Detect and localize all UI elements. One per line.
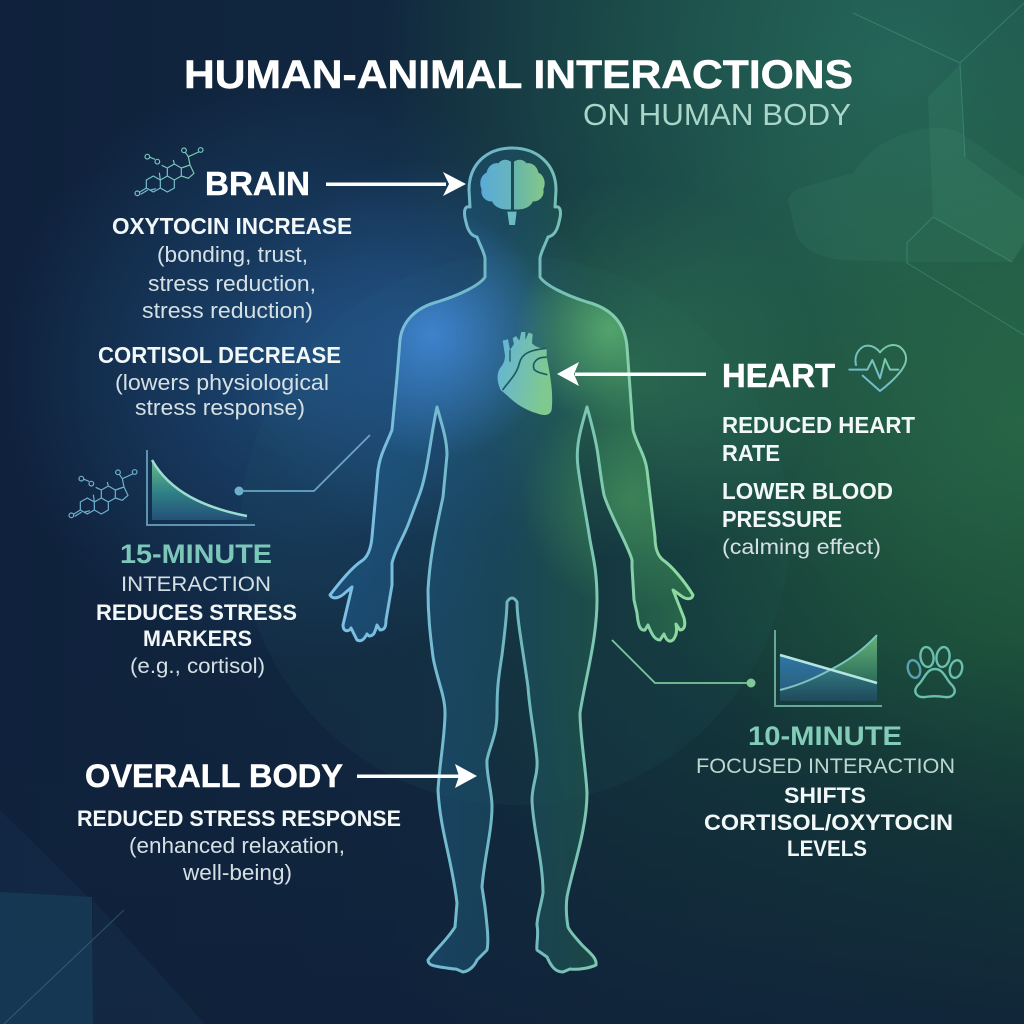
chart: cortisol and oxytocin crossover [775,630,882,706]
text: 15-minute interaction [96,539,297,678]
arrow: to overall body [357,764,477,788]
text: 10-minute interaction: SHIFTS [784,783,866,808]
text: oxytocin increase: (bonding, trust, [157,242,308,267]
text: heart effects: LOWER BLOOD [722,478,893,504]
icon: paw print [906,646,964,697]
text: reduced stress response: well-being) [182,860,292,885]
text: oxytocin increase: stress reduction, [148,271,316,296]
icon: steroid molecule (chart) [69,470,137,518]
text: oxytocin increase: OXYTOCIN INCREASE [112,213,352,239]
body fill [320,140,700,980]
text: 10-minute interaction: LEVELS [787,836,867,861]
text: cortisol decrease [98,342,341,420]
text: reduced stress response [77,806,401,885]
text: 15-minute interaction: REDUCES STRESS [96,600,297,625]
background: dog silhouette and hexagon lines [788,3,1024,335]
text: 15-minute interaction: (e.g., cortisol) [130,655,265,678]
text: oxytocin increase [112,213,352,323]
text: 10-minute interaction [696,721,955,861]
text: 15-minute interaction: INTERACTION [121,573,271,596]
arrow: to brain [326,172,466,196]
icon: anatomical heart [498,332,552,415]
chart: cortisol decay curve [147,450,255,525]
label: heart: HEART [722,357,835,394]
text: heart effects: (calming effect) [722,536,881,559]
text: 15-minute interaction: 15-MINUTE [120,539,272,569]
text: heart effects: PRESSURE [722,506,842,532]
text: reduced stress response: REDUCED STRESS RESPONSE [77,806,401,831]
arrow: to heart [557,362,706,386]
text: cortisol decrease: stress response) [135,395,305,420]
callout line: 10-minute [612,640,756,688]
text: cortisol decrease: (lowers physiological [115,370,329,395]
text: heart effects [722,412,915,559]
callout line: 15-minute [234,435,370,496]
subtitle: ON HUMAN BODY [583,97,851,132]
label: brain: BRAIN [205,165,310,202]
human body figure [320,140,700,980]
text: 10-minute interaction: CORTISOL/OXYTOCIN [704,810,953,835]
text: heart effects: REDUCED HEART [722,412,915,438]
icon: steroid molecule (brain) [135,148,203,196]
text: cortisol decrease: CORTISOL DECREASE [98,342,341,368]
icon: brain [480,160,545,225]
text: 15-minute interaction: MARKERS [143,626,252,651]
text: heart effects: RATE [722,440,780,466]
title: HUMAN-ANIMAL INTERACTIONS [184,53,853,97]
text: reduced stress response: (enhanced relaxation, [129,833,345,858]
text: oxytocin increase: stress reduction) [142,298,313,323]
text: 10-minute interaction: FOCUSED INTERACTION [696,755,955,778]
body stroke [330,148,693,972]
label: overall body: OVERALL BODY [85,758,343,794]
text: 10-minute interaction: 10-MINUTE [748,721,902,751]
icon: heart with pulse [849,345,906,391]
